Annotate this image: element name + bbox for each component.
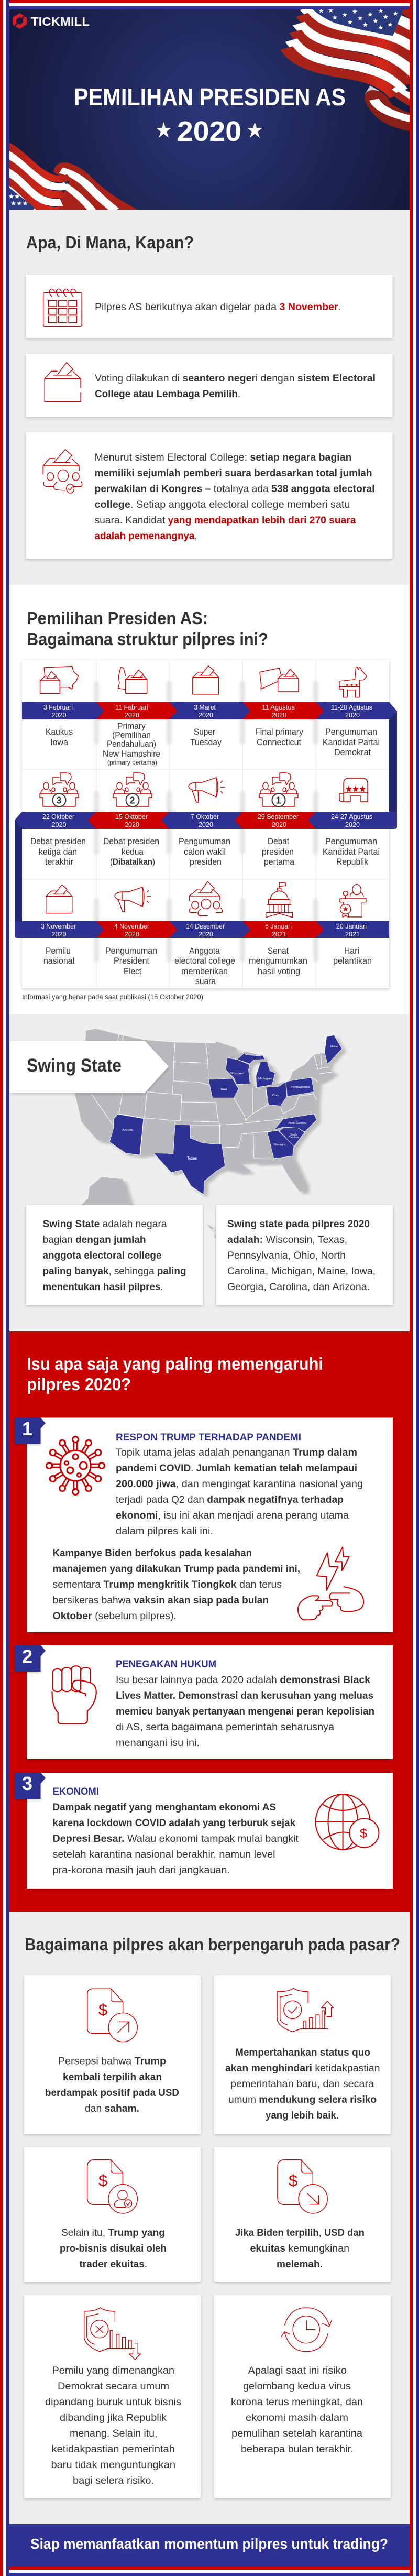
- event labels: Anggota: [189, 946, 220, 956]
- title: 2020: [177, 116, 241, 147]
- map: United States: Ohio: [272, 1094, 279, 1097]
- event labels: President: [114, 956, 149, 966]
- text: [52, 1802, 299, 1876]
- text: pemulihan setelah karantina: [231, 2428, 362, 2439]
- text: Biden paragraph: sementara Trump mengkritik Tiongkok dan terus: [52, 1579, 282, 1590]
- event labels: hasil voting: [258, 967, 300, 976]
- text: [45, 2365, 181, 2486]
- logo: Tickmill: TICKMILL: [31, 15, 90, 28]
- event labels: electoral college: [174, 956, 235, 966]
- text: pandemic paragraph: Topik utama jelas adalah penanganan Trump dalam: [116, 1447, 357, 1458]
- dates: 7 Oktober: [191, 813, 219, 821]
- event labels: kedua: [122, 847, 144, 857]
- text: kembali terpilih akan: [63, 2072, 162, 2083]
- text: Biden paragraph: Kampanye Biden berfokus pada kesalahan: [52, 1548, 252, 1559]
- icon: shield and falling chart: [84, 2308, 140, 2360]
- icon: clock cycle: [281, 2308, 332, 2352]
- card: date: [26, 275, 393, 338]
- dates: 24-27 Agustus: [331, 813, 372, 821]
- icon: donkey: [339, 667, 367, 697]
- event labels: (Pemilihan: [112, 730, 151, 740]
- panel: pengaruh pada pasar: [9, 1912, 410, 2524]
- map: United States: Texas: [187, 1156, 197, 1161]
- icon: podium: [340, 885, 366, 917]
- event labels: Pengumuman: [325, 837, 377, 846]
- event labels: ketiga dan: [39, 847, 77, 857]
- map: United States: Wisconsin: [230, 1072, 245, 1075]
- text: akan menghindari ketidakpastian: [225, 2063, 380, 2074]
- event labels: mengumumkan: [249, 956, 307, 966]
- text: pandemic paragraph: 200.000 jiwa , dan mengingat karantina nasional yang: [116, 1479, 363, 1490]
- card: definition: menentukan hasil pilpres.: [43, 1282, 163, 1293]
- text: [94, 452, 375, 542]
- event labels: Debat presiden: [30, 837, 86, 846]
- heading: Pemilihan Presiden AS:: [27, 608, 208, 628]
- dates: 2020: [199, 711, 213, 719]
- text: Pilpres AS berikutnya akan digelar pada 3 November.: [95, 302, 341, 313]
- text: [95, 373, 376, 400]
- subheading: EKONOMI: [52, 1786, 99, 1797]
- icon: debate 3: [40, 773, 79, 807]
- text: perwakilan di Kongres – totalnya ada 538 anggota electoral: [94, 484, 375, 495]
- card: status quo: [214, 1975, 391, 2134]
- map: United States: Iowa: [220, 1088, 227, 1091]
- panel: header banner: [5, 7, 417, 214]
- card: Biden wins: [214, 2147, 391, 2282]
- badge: number 3: [15, 1773, 46, 1799]
- event labels: Elect: [124, 967, 141, 976]
- card: definition: bagian dengan jumlah: [43, 1235, 146, 1246]
- dates: 2020: [125, 930, 139, 938]
- event labels: calon wakil: [184, 847, 226, 857]
- event labels: Kaukus: [46, 727, 73, 737]
- title: [74, 83, 346, 147]
- icon: document arrow up: [87, 1989, 137, 2042]
- event labels: Tuesday: [190, 738, 222, 747]
- text: menang. Selain itu,: [70, 2428, 157, 2439]
- dates: 11-20 Agustus: [331, 703, 372, 711]
- text: umum mendukung selera risiko: [228, 2094, 377, 2105]
- text: korona terus meningkat, dan: [231, 2397, 363, 2408]
- dates: 14 Desember: [186, 922, 225, 930]
- map: United States: Carolina: [289, 1136, 299, 1139]
- event labels: Pendahuluan): [107, 739, 156, 749]
- subheading: RESPON TRUMP TERHADAP PANDEMI: [116, 1432, 301, 1443]
- card: swing state list: Swing state pada pilpres 2020: [227, 1219, 370, 1230]
- text: setelah karantina nasional berakhir, namun level: [52, 1849, 275, 1860]
- dates: 2020: [272, 821, 286, 828]
- text: berdampak positif pada USD: [45, 2088, 179, 2099]
- map: United States: [75, 1029, 342, 1238]
- heading: Bagaimana struktur pilpres ini?: [27, 629, 268, 649]
- text: [231, 2365, 363, 2455]
- flag: bottom left: [5, 145, 139, 214]
- icon: document arrow down: [278, 2160, 327, 2213]
- heading: [27, 608, 268, 649]
- card: issue 1 pandemic: [15, 1418, 393, 1632]
- map: United States: Pennsylvania: [291, 1086, 310, 1089]
- logo: Tickmill: [13, 13, 90, 29]
- text: Dampak negatif yang menghantam ekonomi AS: [52, 1802, 276, 1813]
- dates: 2020: [345, 821, 360, 828]
- event labels: Debat: [268, 837, 289, 846]
- dates: 2021: [345, 930, 360, 938]
- icon: debate 2: [113, 773, 152, 807]
- icon: globe and dollar: $: [360, 1826, 367, 1841]
- dates: [41, 703, 372, 938]
- event labels: Pemilu: [46, 946, 71, 956]
- card: definition: Swing State adalah negara: [43, 1219, 167, 1230]
- card: Democrat win: [24, 2295, 201, 2498]
- label: Swing State: [9, 1041, 169, 1093]
- card: swing state list: [216, 1205, 393, 1305]
- event labels: nasional: [43, 956, 74, 966]
- text: Selain itu, Trump yang: [61, 2228, 165, 2239]
- text: bagi selera risiko.: [73, 2475, 154, 2486]
- event labels: Senat: [268, 946, 289, 956]
- text: Biden paragraph: [52, 1548, 300, 1622]
- card: issue 3 economy: [15, 1773, 393, 1889]
- card: swing state list: Carolina, Michigan, Maine, Iowa,: [227, 1266, 376, 1277]
- icon: elephant: [339, 778, 368, 802]
- footer: call to action: Siap memanfaatkan momentum pilpres untuk trading?: [30, 2536, 388, 2552]
- text: pra-korona masih jauh dari jangkauan.: [52, 1865, 230, 1876]
- text: adalah pemenangnya.: [94, 531, 197, 542]
- dates: 2020: [51, 930, 66, 938]
- title: PEMILIHAN PRESIDEN AS: [74, 83, 346, 111]
- heading: [27, 1354, 323, 1394]
- subheading: PENEGAKAN HUKUM: [116, 1659, 216, 1670]
- text: melemah.: [277, 2259, 323, 2270]
- footer: call to action: [9, 2524, 410, 2576]
- icon: calendar: [43, 289, 82, 326]
- text: di AS, serta bagaimana pemerintah seharusnya: [116, 1722, 334, 1733]
- text: [235, 2228, 365, 2270]
- text: [60, 2228, 167, 2270]
- badge: number 3: 3: [22, 1773, 32, 1794]
- card: issue 2 law enforcement: [15, 1645, 393, 1759]
- icon: globe and dollar: [315, 1794, 379, 1850]
- dates: 6 Januari: [265, 922, 292, 930]
- text: Apalagi saat ini risiko: [248, 2365, 347, 2376]
- event labels: suara: [195, 977, 216, 986]
- text: dipandang buruk untuk bisnis: [45, 2397, 181, 2408]
- text: College atau Lembaga Pemilih.: [95, 389, 240, 400]
- text: Depresi Besar. Walau ekonomi tampak mulai bangkit: [52, 1833, 299, 1844]
- event labels: Pengumuman: [105, 946, 157, 956]
- icon: debate 1: 1: [275, 795, 281, 806]
- text: memiliki sejumlah pemberi suara berdasarkan total jumlah: [94, 468, 372, 479]
- card: swing state list: Pennsylvania, Ohio, North: [227, 1250, 346, 1261]
- text: karena lockdown COVID adalah yang terburuk sejak: [52, 1818, 295, 1829]
- map: United States: South: [290, 1133, 297, 1137]
- heading: Isu apa saja yang paling memengaruhi: [27, 1354, 323, 1373]
- panel: swing state: [9, 1014, 410, 1331]
- dates: 15 Oktober: [115, 813, 148, 821]
- icon: New Hampshire ballot: [118, 667, 147, 693]
- icon: fist: [52, 1666, 96, 1723]
- icon: debate 1: [259, 773, 298, 807]
- text: Biden paragraph: bersikeras bahwa vaksin akan siap pada bulan: [52, 1595, 269, 1606]
- text: Voting dilakukan di seantero negeri dengan sistem Electoral: [95, 373, 376, 384]
- event labels: Pengumuman: [325, 727, 377, 737]
- text: dibanding jika Republik: [60, 2413, 167, 2424]
- panel: struktur pilpres timeline: [15, 608, 397, 1001]
- map: United States: Arizona: [122, 1129, 134, 1132]
- event labels: Connecticut: [257, 738, 301, 747]
- icon: ballot box national: [46, 885, 72, 913]
- text: [225, 2047, 380, 2121]
- text: Biden paragraph: Oktober (sebelum pilpres).: [52, 1611, 177, 1622]
- text: college. Setiap anggota electoral college memberi satu: [94, 499, 350, 510]
- text: baru tidak menguntungkan: [51, 2460, 175, 2471]
- icon: Iowa ballot: [40, 667, 78, 693]
- dates: 2020: [125, 711, 139, 719]
- icon: ballot and voters: [43, 450, 82, 493]
- text: Demokrat secara umum: [58, 2381, 169, 2392]
- text: [45, 2056, 179, 2114]
- text: Persepsi bahwa Trump: [58, 2056, 166, 2067]
- dates: 20 Januari: [336, 922, 367, 930]
- map: United States: North Carolina: [289, 1122, 307, 1125]
- event labels: presiden: [190, 857, 222, 867]
- card: definition: [26, 1205, 203, 1305]
- text: pemerintahan baru, dan secara: [230, 2079, 374, 2090]
- event labels: Kandidat Partai: [323, 847, 380, 857]
- text: Mempertahankan status quo: [235, 2047, 370, 2058]
- text: Pemilu yang dimenangkan: [52, 2365, 174, 2376]
- dates: 4 November: [114, 922, 150, 930]
- icon: document with trader: [87, 2160, 137, 2213]
- text: yang lebih baik.: [266, 2110, 339, 2121]
- event labels: Demokrat: [334, 748, 371, 757]
- icon: document arrow up: $: [98, 2001, 107, 2019]
- card: second wave: [214, 2295, 391, 2498]
- text: Isu besar lainnya pada 2020 adalah demonstrasi Black: [116, 1675, 370, 1686]
- badge: number 1: [15, 1418, 46, 1444]
- text: pandemic paragraph: terjadi pada Q2 dan dampak negatifnya terhadap: [116, 1494, 344, 1505]
- text: menangani isu ini.: [116, 1738, 200, 1749]
- card: swing state list: adalah: Wisconsin, Texas,: [227, 1235, 347, 1246]
- dates: 2020: [272, 711, 286, 719]
- event labels: Primary: [117, 722, 146, 731]
- timeline cells: [22, 660, 389, 988]
- text: ketidakpastian pemerintah: [51, 2444, 175, 2455]
- event labels: New Hampshire: [103, 749, 160, 759]
- icon: Connecticut ballot: [260, 668, 299, 692]
- event labels: (primary pertama): [107, 759, 157, 766]
- text: ekuitas kemungkinan: [250, 2243, 349, 2254]
- dates: 3 Maret: [194, 703, 216, 711]
- icon: document arrow down: $: [289, 2171, 297, 2190]
- dates: 2020: [199, 821, 213, 828]
- note: Informasi yang benar pada saat publikasi (15 Oktober 2020): [22, 993, 203, 1001]
- icon: debate 3: 3: [57, 795, 62, 806]
- event labels: Pengumuman: [179, 837, 230, 846]
- panel: Apa, Di Mana, Kapan: [9, 210, 410, 585]
- dates: 22 Oktober: [42, 813, 75, 821]
- icon: ballot box: [45, 363, 81, 402]
- dates: 11 Februari: [115, 703, 148, 711]
- dates: 3 November: [41, 922, 76, 930]
- dates: 2020: [125, 821, 139, 828]
- event labels: Iowa: [50, 738, 69, 747]
- map: United States: Michigan: [258, 1077, 272, 1080]
- event labels: Republik: [336, 857, 369, 867]
- event labels: Super: [194, 727, 215, 737]
- icon: shield and rising chart: [277, 1988, 333, 2032]
- text: gelombang kedua virus: [243, 2381, 351, 2392]
- dates: 29 September: [258, 813, 299, 821]
- icon: capitol: [266, 882, 293, 918]
- panel: isu pilpres: [9, 1331, 413, 1912]
- text: Biden paragraph: manajemen yang dilakukan Trump pada pandemi ini,: [52, 1564, 300, 1575]
- map: United States: Maine: [330, 1045, 338, 1049]
- map: United States: Georgia: [274, 1143, 286, 1147]
- badge: number 2: 2: [22, 1645, 32, 1667]
- card: Trump positive: [24, 1975, 201, 2134]
- event labels: pelantikan: [333, 956, 372, 966]
- icon: megaphone president elect: [115, 887, 151, 912]
- event labels: pertama: [264, 857, 295, 867]
- text: Menurut sistem Electoral College: setiap negara bagian: [94, 452, 352, 463]
- icon: electoral college voters: [189, 881, 222, 916]
- event labels: (Dibatalkan): [110, 857, 155, 867]
- event labels: memberikan: [181, 967, 228, 976]
- icon: ballot box: [193, 666, 218, 694]
- dates: 2020: [51, 821, 66, 828]
- card: swing state list: Georgia, Carolina, dan Arizona.: [227, 1282, 370, 1293]
- text: pandemic paragraph: [116, 1447, 363, 1537]
- text: dan saham.: [85, 2103, 139, 2114]
- text: pandemic paragraph: ekonomi, isu ini akan menjadi arena perang utama: [116, 1510, 349, 1521]
- dates: 2020: [199, 930, 213, 938]
- text: suara. Kandidat yang mendapatkan lebih dari 270 suara: [94, 515, 356, 526]
- icon: megaphone: [189, 778, 225, 802]
- heading: pilpres 2020?: [27, 1374, 131, 1394]
- text: ekonomi masih dalam: [246, 2413, 348, 2424]
- ribbon: date bands: [15, 702, 397, 938]
- card: voting: [26, 354, 393, 417]
- text: beberapa bulan terakhir.: [241, 2444, 353, 2455]
- card: definition: paling banyak, sehingga paling: [43, 1266, 186, 1277]
- text: memicu banyak pertanyaan mengenai peran kepolisian: [116, 1706, 374, 1717]
- dates: 11 Agustus: [262, 703, 295, 711]
- text: pandemic paragraph: pandemi COVID. Jumlah kematian telah melampaui: [116, 1463, 357, 1474]
- event labels: Kandidat Partai: [323, 738, 380, 747]
- icon: bolts and pointing hands: [298, 1547, 363, 1620]
- card: definition: anggota electoral college: [43, 1250, 161, 1261]
- dates: 2021: [272, 930, 286, 938]
- event labels: terakhir: [45, 857, 73, 867]
- text: trader ekuitas.: [80, 2259, 147, 2270]
- text: Lives Matter. Demonstrasi dan kerusuhan yang meluas: [116, 1690, 373, 1701]
- dates: 2020: [345, 711, 360, 719]
- badge: number 1: 1: [22, 1418, 32, 1439]
- text: [116, 1675, 374, 1749]
- dates: 3 Februari: [43, 703, 73, 711]
- icon: debate 2: 2: [130, 795, 135, 806]
- text: pandemic paragraph: dalam pilpres kali ini.: [116, 1526, 213, 1537]
- event labels: Final primary: [255, 727, 304, 737]
- event labels: presiden: [262, 847, 294, 857]
- icon: virus: [46, 1437, 105, 1494]
- text: Jika Biden terpilih, USD dan: [235, 2228, 365, 2239]
- event labels: Hari: [344, 946, 359, 956]
- icon: document with trader: $: [98, 2171, 107, 2190]
- dates: 2020: [51, 711, 66, 719]
- text: pro-bisnis disukai oleh: [60, 2243, 167, 2254]
- label: Swing State: Swing State: [27, 1055, 122, 1076]
- heading: Apa, Di Mana, Kapan?: [26, 233, 194, 252]
- card: electoral college: [26, 432, 393, 559]
- flag: top right: [286, 7, 417, 132]
- badge: number 2: [15, 1645, 46, 1672]
- event labels: [30, 722, 380, 986]
- card: pro-business: [24, 2147, 201, 2282]
- event labels: Debat presiden: [103, 837, 159, 846]
